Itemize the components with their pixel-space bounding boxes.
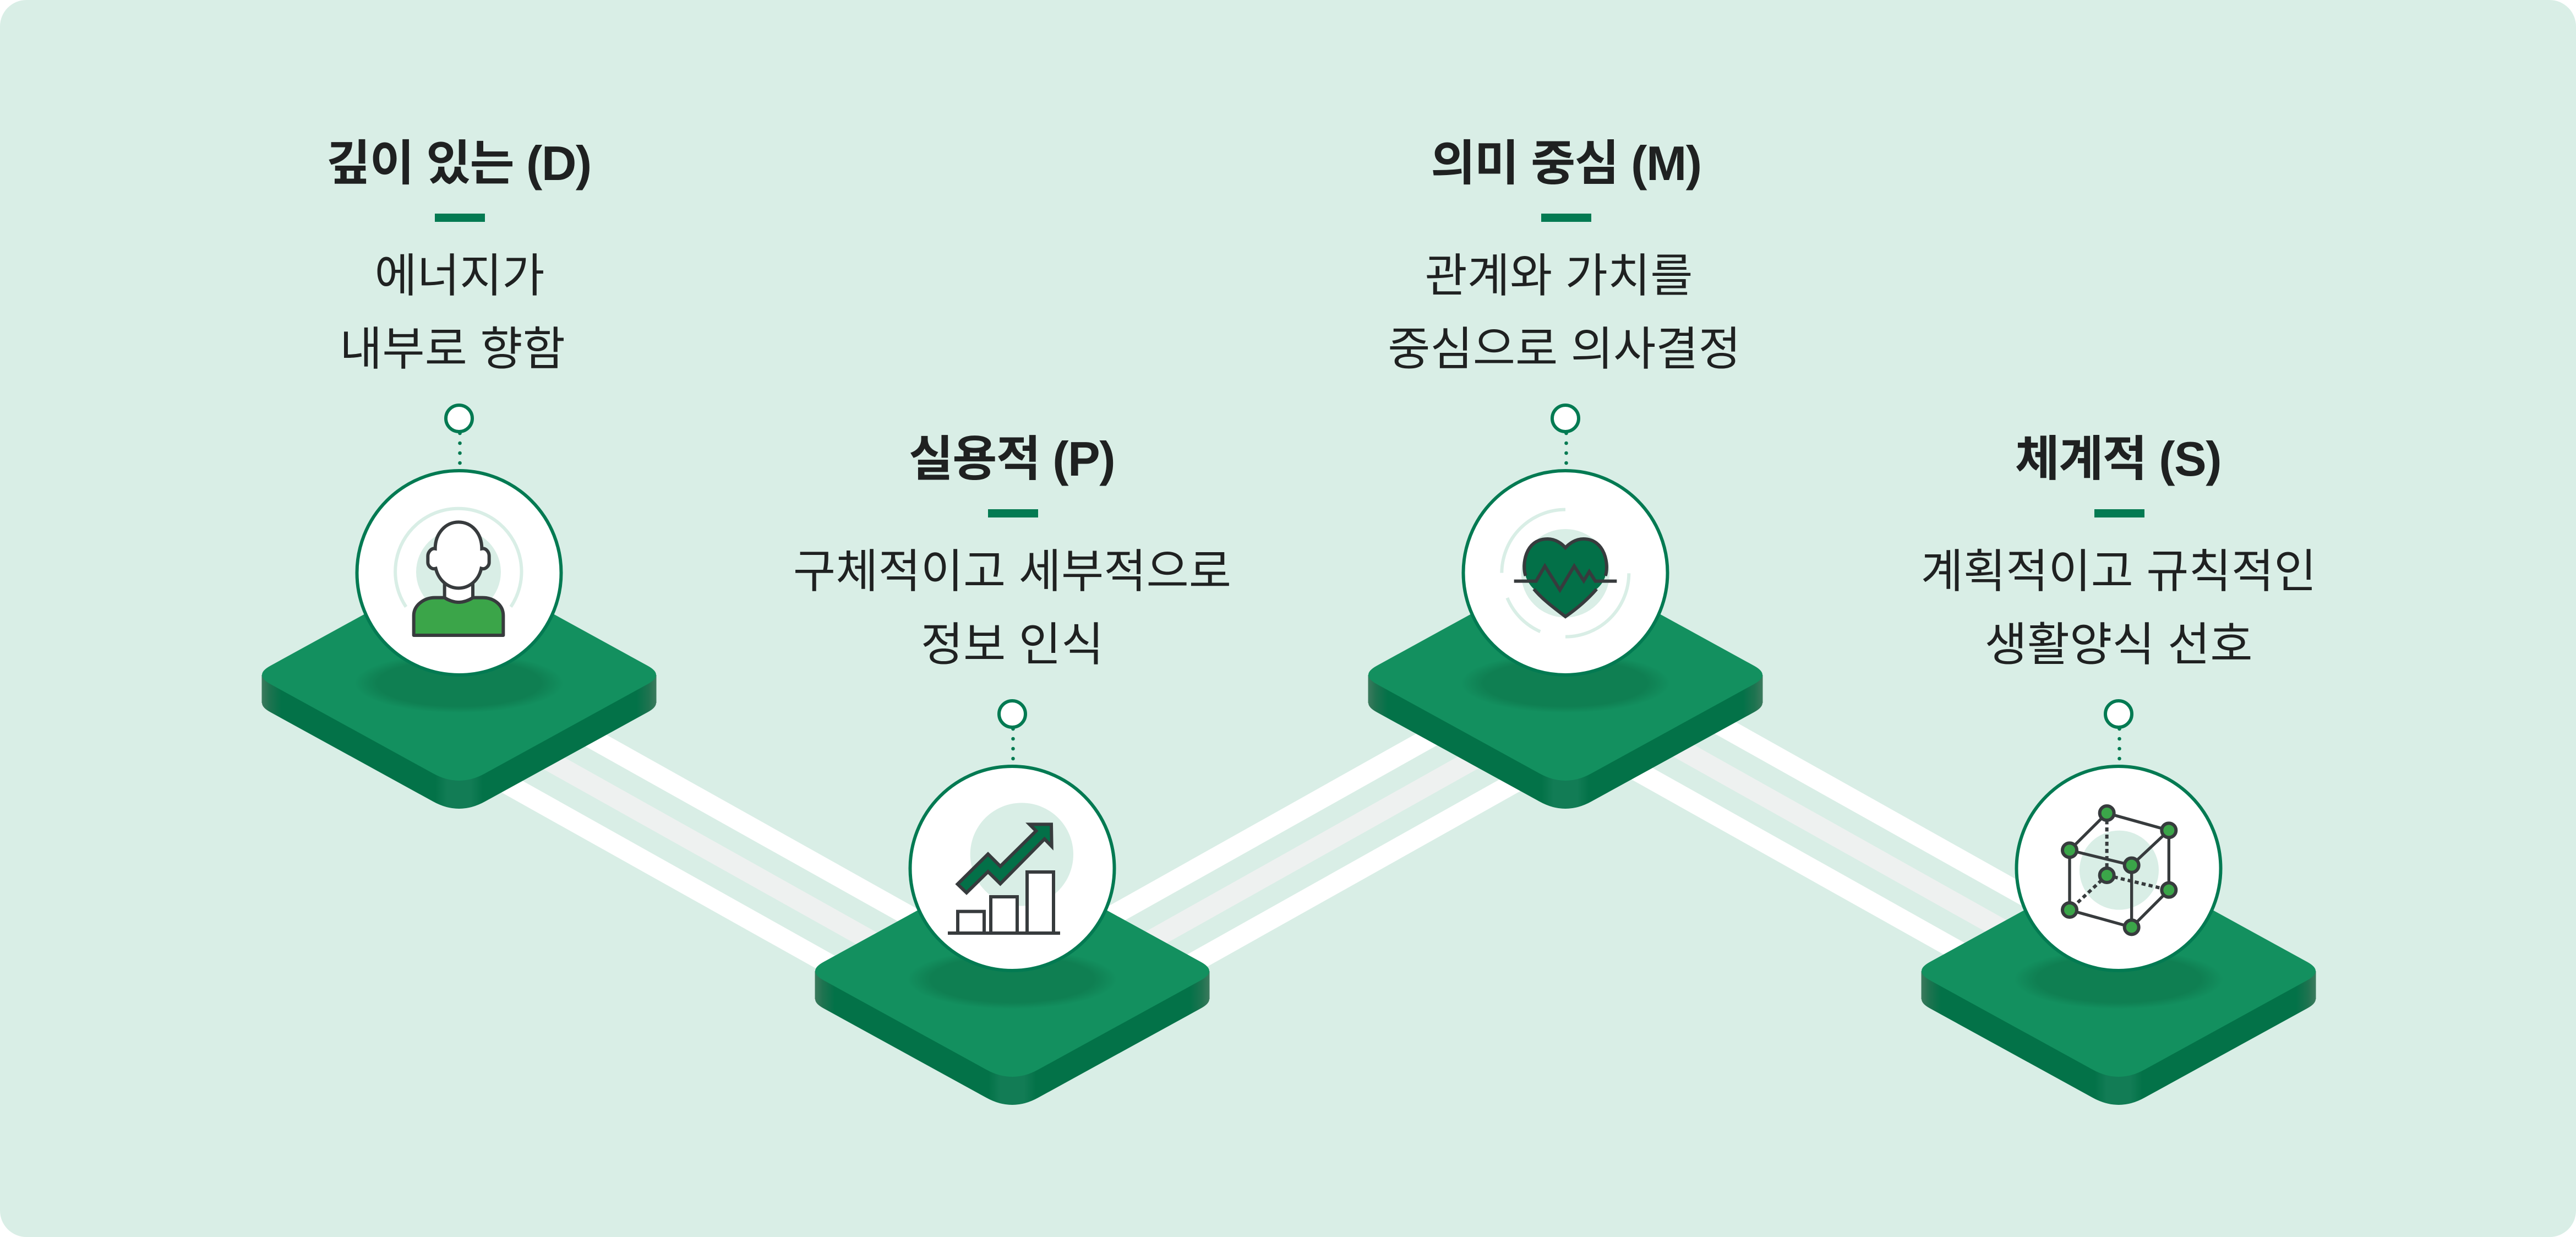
description: meaning: 중심으로 의사결정 xyxy=(1388,323,1741,375)
marker pin 1 xyxy=(446,405,472,465)
accent rule 2 xyxy=(988,509,1038,517)
marker pin 2 xyxy=(999,701,1025,760)
icon badge: cube network xyxy=(2017,766,2220,971)
heading: meaning: 의미 중심 (M) xyxy=(1431,136,1701,190)
heading: systematic: 체계적 (S) xyxy=(2015,432,2221,486)
marker pin 4 xyxy=(2105,701,2132,760)
description: practical: 정보 인식 xyxy=(921,619,1104,671)
connector: step 3 to step 4 xyxy=(1607,662,2053,1004)
accent rule 3 xyxy=(1541,214,1591,222)
description: depth: 내부로 향함 xyxy=(340,323,565,375)
connector: step 1 to step 2 xyxy=(495,684,947,1030)
platform 3 xyxy=(1368,569,1762,809)
description: meaning: 관계와 가치를 xyxy=(1425,250,1693,302)
icon badge: heart with pulse xyxy=(1463,471,1668,675)
icon badge: person xyxy=(357,471,561,675)
platform 4 xyxy=(1921,865,2316,1105)
marker pin 3 xyxy=(1552,405,1579,465)
description: depth: 에너지가 xyxy=(374,250,545,302)
heading: depth: 깊이 있는 (D) xyxy=(326,136,591,190)
accent rule 1 xyxy=(435,214,485,222)
heading: practical: 실용적 (P) xyxy=(909,432,1115,486)
description: systematic: 생활양식 선호 xyxy=(1984,619,2253,671)
icon badge: growth chart xyxy=(910,766,1114,971)
description: practical: 구체적이고 세부적으로 xyxy=(793,546,1231,597)
platform 2 xyxy=(815,865,1210,1105)
connector: step 2 to step 3 xyxy=(1073,688,1519,1030)
accent rule 4 xyxy=(2094,509,2144,517)
platform 1 xyxy=(262,569,656,809)
description: systematic: 계획적이고 규칙적인 xyxy=(1921,546,2316,597)
